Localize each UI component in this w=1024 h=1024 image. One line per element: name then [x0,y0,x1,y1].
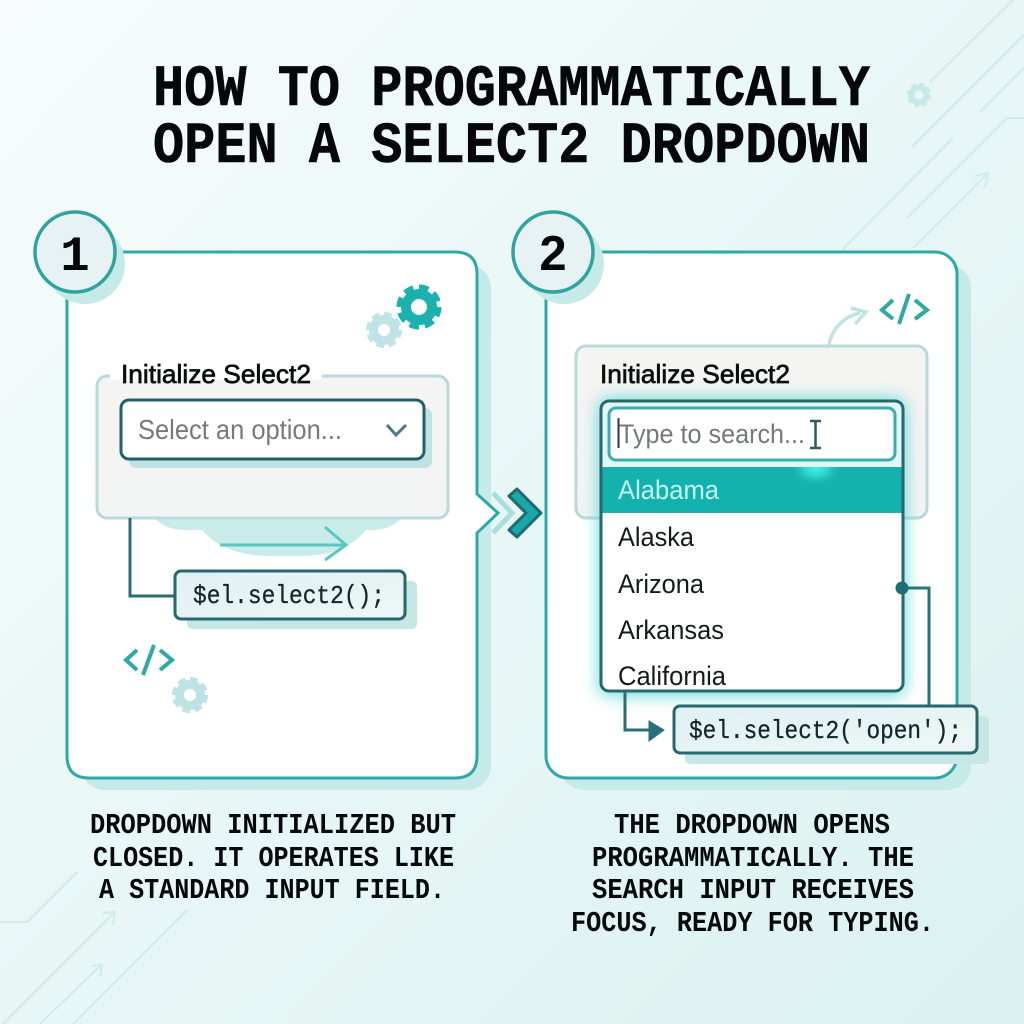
title: OPEN A SELECT2 DROPDOWN [153,115,870,180]
icon: curved arrow [829,308,866,345]
step number 1: 1 [60,229,90,285]
form card 2 [576,346,927,518]
caption: step 1: A STANDARD INPUT FIELD. [99,874,445,907]
caption: step 2: PROGRAMMATICALLY. THE [592,842,914,875]
highlighted option row: Alabama [618,475,720,505]
form card 1 [97,376,448,518]
highlighted option row [602,467,902,513]
code box: select2 init [175,571,417,629]
caption: step 1: CLOSED. IT OPERATES LIKE [93,842,454,875]
connector blob under card [155,518,402,556]
icon: code brackets [126,645,172,675]
dropdown border [601,401,903,691]
search input: Type to search... [619,419,805,449]
title [153,58,870,180]
panel: step 1 [35,212,498,790]
option list: Arizona [618,569,705,599]
step number 2 [513,212,604,304]
step number 1 [35,212,125,304]
caption: step 2: THE DROPDOWN OPENS [614,809,890,842]
dropdown panel [601,401,903,691]
background gear icon [908,84,930,106]
caption: step 1: DROPDOWN INITIALIZED BUT [90,809,456,842]
connector: dot to code box [896,582,929,707]
caption: step 2: SEARCH INPUT RECEIVES [592,874,914,907]
code box: select2 init: $el.select2(); [193,581,385,611]
step number 2: 2 [539,227,567,281]
search input [609,408,895,460]
panel 1 body with arrow notch [67,252,498,778]
arrow [220,527,346,560]
option list: California [618,661,727,691]
code box: select2 open [674,706,989,764]
arrow: dropdown to code box [625,691,664,741]
label: initialize select2: Initialize Select2 [600,359,790,389]
code box: select2 open: $el.select2('open'); [689,716,962,746]
panel 2 body [546,252,957,778]
caption: step 2: FOCUS, READY FOR TYPING. [571,907,934,940]
background circuit lines top right [842,0,1024,250]
option list: Alaska [618,522,695,552]
select input closed [121,400,432,468]
icon: code brackets [882,294,927,324]
label: initialize select2: Initialize Select2 [121,359,311,389]
panel: step 2 [513,212,989,790]
dropdown glow [598,398,906,696]
caption: step 1 [90,809,456,907]
icon: large gear [400,288,438,326]
arrow: chevrons between panels [493,489,541,537]
caption: step 2 [571,809,934,940]
panel 1 shadow [81,264,491,790]
connector line [130,518,176,596]
icon: small gear [368,314,400,346]
option list: Arkansas [618,615,724,645]
title: HOW TO PROGRAMMATICALLY [153,58,870,123]
option list [618,522,727,691]
label gap [110,372,322,380]
background circuit lines bottom left [0,872,187,1024]
select input closed: Select an option... [138,414,342,445]
icon: lower gear [174,680,206,710]
panel 2 shadow [560,264,971,790]
search area background [602,402,902,467]
